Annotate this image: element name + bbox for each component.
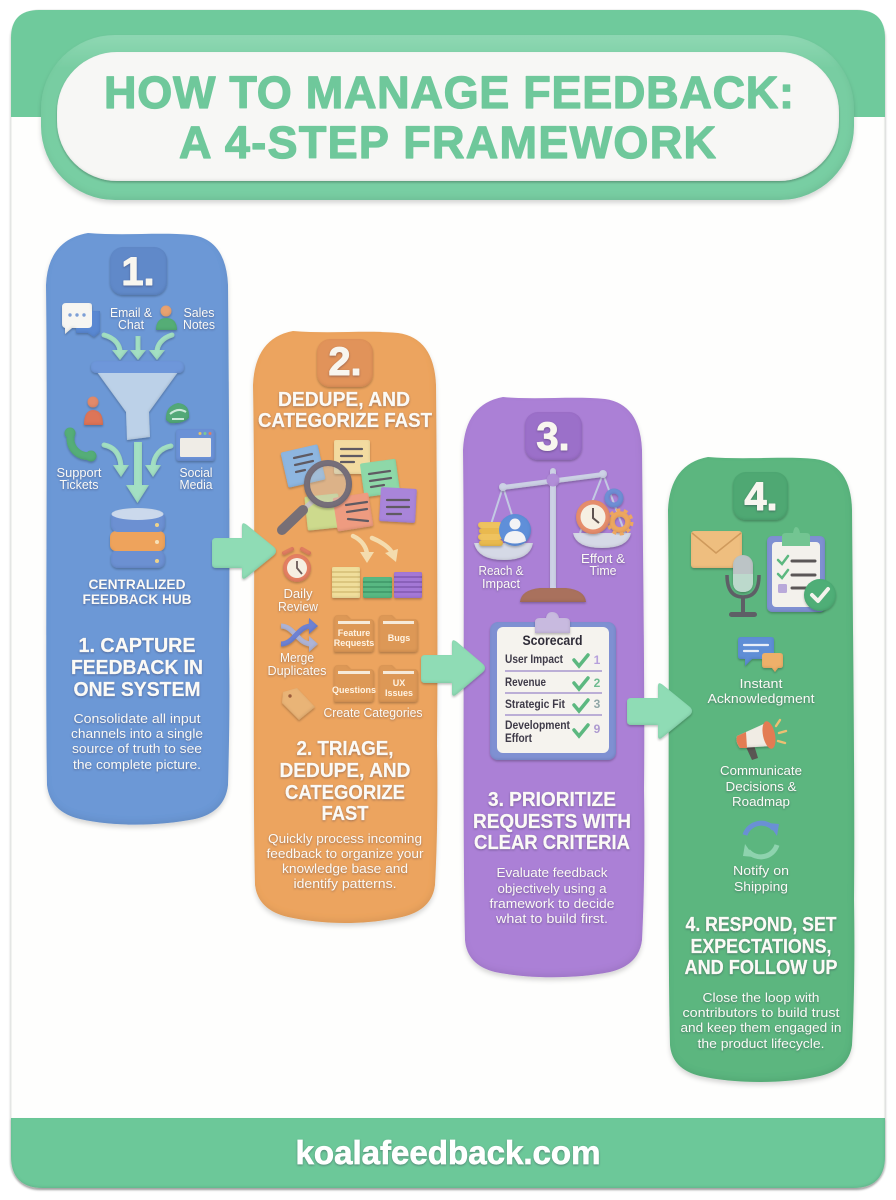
body: triage: feedback to organize your [266,846,424,861]
label: effort and time: Time [590,564,617,578]
body: respond [680,990,842,1051]
row: user impact [505,653,601,667]
heading: capture: FEEDBACK IN [71,657,203,679]
body: prioritize: what to build first. [495,911,608,926]
icon: microphone [727,555,759,617]
panel: step 4 respond [668,457,854,1082]
body: capture: source of truth to see [72,741,202,756]
folder: feature requests: Feature [338,628,370,638]
folder: ux issues [379,665,418,702]
row: development effort [505,720,601,745]
icon: database hub [110,508,165,568]
arrows to hub [104,442,171,503]
heading: prioritize: CLEAR CRITERIA [474,832,630,854]
row: user impact: User Impact [505,654,563,666]
body: triage: Quickly process incoming [268,831,422,846]
panel: step 3 prioritize [463,397,644,977]
step badge 2 [317,339,373,387]
body: respond: and keep them engaged in [680,1020,842,1035]
scorecard clipboard: Scorecard [522,632,582,648]
label: centralized hub: FEEDBACK HUB [82,591,192,607]
icon: merge arrows [281,618,318,652]
icon: red person [84,396,103,425]
row: development effort: 9 [594,722,601,736]
header band [11,10,885,117]
body: capture [71,711,203,772]
arrow: step 3 to step 4 [627,683,692,739]
body: triage [266,831,424,891]
title text [104,67,794,168]
icon: alarm clock [283,549,311,582]
folder: ux issues: UX [393,678,405,688]
label: reach and impact [478,564,524,591]
label: sales notes [183,306,215,332]
label: support tickets: Tickets [60,478,98,492]
row: strategic fit: Strategic Fit [505,699,565,711]
body: prioritize: Evaluate feedback [496,865,608,880]
icon: browser window [176,429,215,461]
label: social media: Social [180,466,212,480]
body: triage: identify patterns. [294,876,396,891]
title text: A 4-STEP FRAMEWORK [179,117,716,168]
title text: HOW TO MANAGE FEEDBACK: [104,67,794,118]
body: prioritize [490,865,614,926]
folder: ux issues: Issues [385,688,413,698]
body: respond: the product lifecycle. [698,1036,824,1051]
label: daily review: Daily [284,587,313,601]
folder: bugs: Bugs [388,633,410,643]
label: communicate decisions [720,764,802,809]
footer band [11,1118,885,1188]
row: user impact: 1 [594,653,601,667]
label: notify on shipping [733,864,789,894]
heading: respond: AND FOLLOW UP [684,957,838,979]
body: capture: the complete picture. [73,757,201,772]
label: daily review [278,587,319,614]
coins and user [478,514,531,546]
row: revenue: Revenue [505,677,546,689]
body: capture: channels into a single [71,726,203,741]
panel: step 2 triage [253,331,437,923]
heading: respond: 4. RESPOND, SET [686,914,836,936]
footer url: koalafeedback.com [296,1134,600,1171]
label: instant acknowledgment: Instant [740,677,783,691]
clock and gears [576,491,632,534]
heading: capture [71,635,203,701]
panel: step 1 capture [46,233,229,825]
title banner [41,35,854,200]
folder: feature requests [334,615,374,652]
icon: phone [64,428,96,462]
folder: questions: Questions [332,685,376,695]
label: centralized hub: CENTRALIZED [88,576,186,592]
label: social media: Media [180,478,213,492]
folder: feature requests: Requests [334,638,374,648]
label: email and chat: Email & [110,306,153,320]
label: notify on shipping: Notify on [733,864,789,878]
folder: questions [332,665,376,702]
label: create categories: Create Categories [324,706,422,720]
label: sales notes: Sales [184,306,214,320]
fragment heading: DEDUPE, AND [278,389,410,411]
icon: chat bubbles [738,637,783,672]
step badge 3 [525,412,582,460]
label: merge duplicates: Merge [280,651,314,665]
heading: respond [684,914,838,979]
label: sales notes: Notes [183,318,215,332]
folder: bugs [379,615,418,652]
label: social media [180,466,213,492]
arrows to stacks [353,536,398,563]
step badge 1: 1. [121,250,155,294]
row: strategic fit [505,697,601,711]
label: communicate decisions: Decisions & [726,780,797,794]
heading: triage [280,738,410,825]
step badge 4: 4. [744,475,778,519]
row: strategic fit: 3 [594,697,601,711]
icon: sales person [156,306,177,330]
label: reach and impact: Reach & [478,564,524,578]
row: revenue [505,676,601,690]
arrows into funnel [104,335,172,360]
body: prioritize: objectively using a [498,881,607,896]
icon: megaphone [736,720,786,760]
heading: capture: 1. CAPTURE [78,635,196,657]
row: revenue: 2 [594,676,601,690]
heading: prioritize: REQUESTS WITH [473,811,631,833]
icon: chat bubbles [62,303,100,337]
icon: cycle arrows [743,823,779,857]
label: communicate decisions: Roadmap [732,795,790,809]
heading: triage: CATEGORIZE [285,782,405,804]
label: daily review: Review [278,600,319,614]
label: merge duplicates [268,651,326,678]
icon: envelope [691,531,742,568]
label: centralized hub [82,576,192,607]
body: prioritize: framework to decide [490,896,614,911]
fragment heading [258,389,432,432]
icon: checklist clipboard [767,527,836,612]
icon: sorted stacks [332,567,422,598]
fragment heading: CATEGORIZE FAST [258,410,432,432]
heading: prioritize: 3. PRIORITIZE [488,789,616,811]
icon: balance scale [474,468,632,602]
label: notify on shipping: Shipping [734,880,788,894]
row: development effort: Effort [505,733,532,745]
icon: sticky notes and magnifier [280,440,417,532]
step badge 4 [733,472,788,520]
arrow: step 2 to step 3 [421,640,485,696]
label: effort and time [581,552,626,578]
label: support tickets [56,466,102,492]
body: respond: Close the loop with [702,990,820,1005]
scorecard clipboard [490,612,616,760]
label: support tickets: Support [56,466,102,480]
label: reach and impact: Impact [482,577,521,591]
icon: social blob [166,403,189,423]
row: development effort: Development [505,720,570,732]
body: triage: knowledge base and [282,861,408,876]
step badge 2: 2. [328,340,362,384]
body: respond: contributors to build trust [682,1005,840,1020]
label: email and chat [110,306,153,332]
heading: triage: 2. TRIAGE, [296,738,394,760]
label: email and chat: Chat [118,318,145,332]
heading: prioritize [473,789,631,854]
body: capture: Consolidate all input [74,711,201,726]
label: merge duplicates: Duplicates [268,664,326,678]
arrow: step 1 to step 2 [212,523,276,579]
heading: respond: EXPECTATIONS, [690,936,832,958]
heading: capture: ONE SYSTEM [74,679,200,701]
icon: tag [282,688,315,720]
step badge 1 [110,247,167,295]
label: instant acknowledgment [708,677,815,706]
heading: triage: DEDUPE, AND [280,760,410,782]
label: communicate decisions: Communicate [720,764,802,778]
label: effort and time: Effort & [581,552,626,566]
label: instant acknowledgment: Acknowledgment [708,692,815,706]
step badge 3: 3. [536,415,570,459]
icon: funnel [91,361,184,440]
heading: triage: FAST [322,803,368,825]
